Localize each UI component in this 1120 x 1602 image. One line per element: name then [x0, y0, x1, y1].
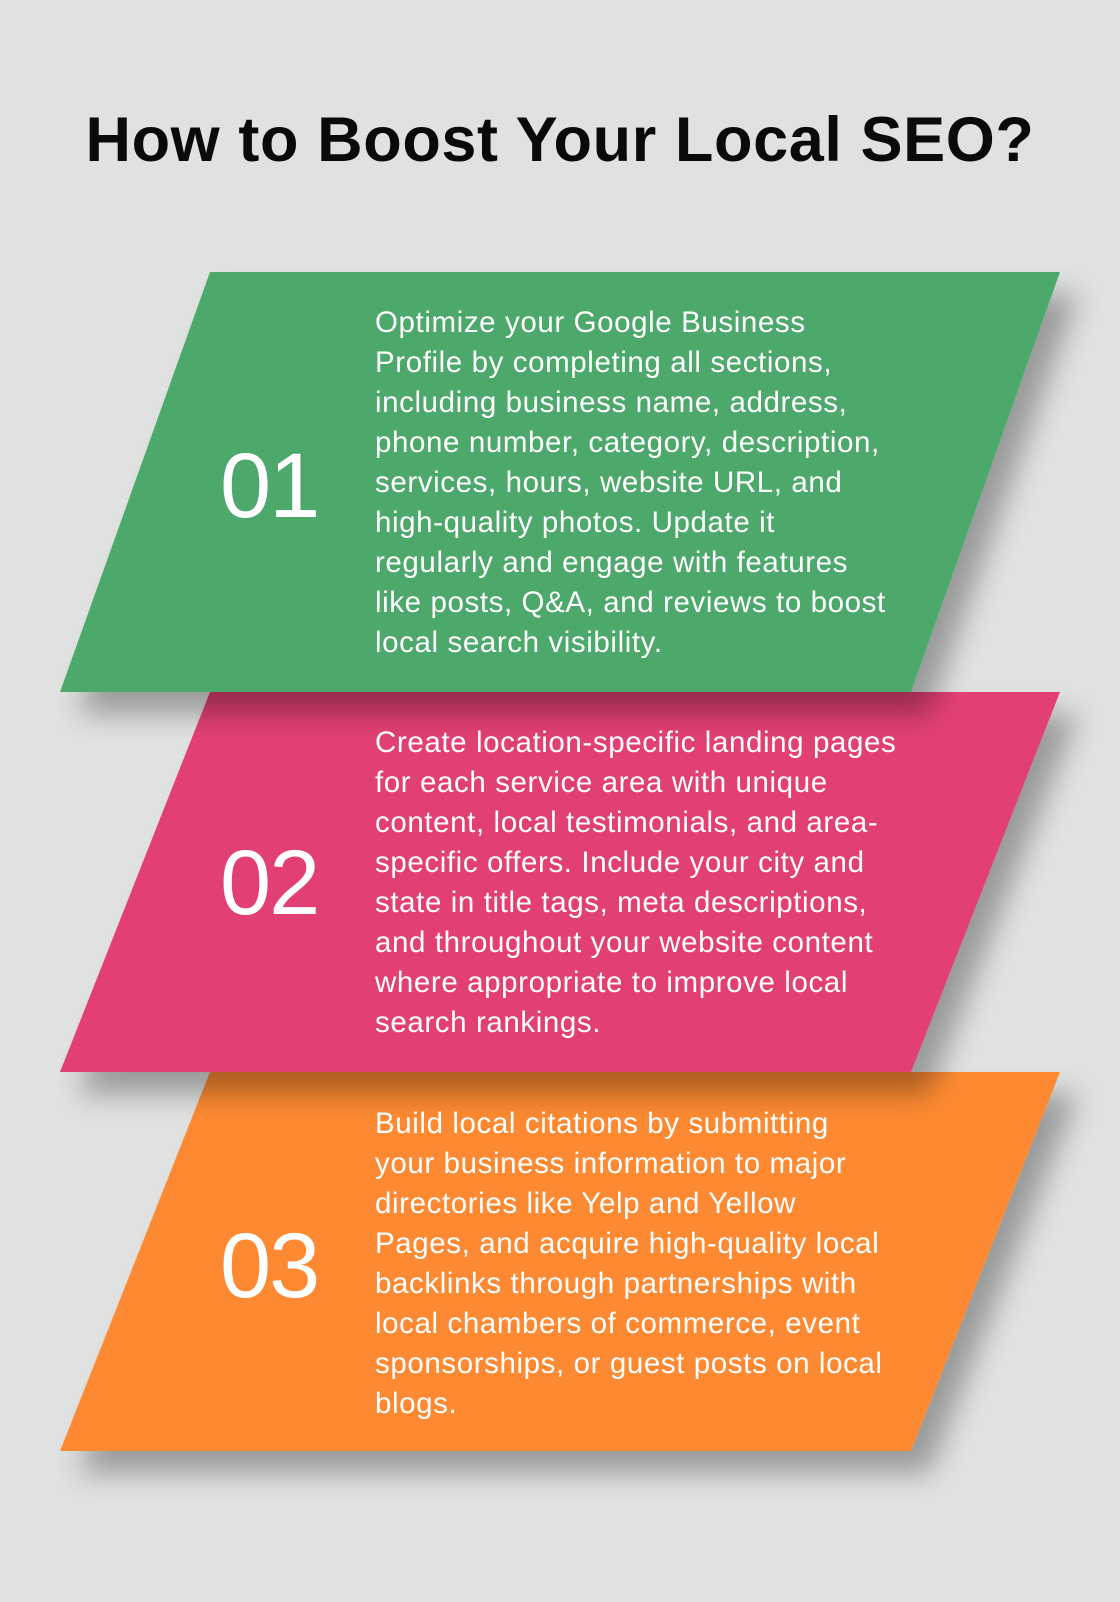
panel 3 text: backlinks through partnerships with [375, 1267, 857, 1300]
panel 2 text: specific offers. Include your city and [375, 846, 865, 879]
panel 2 text: where appropriate to improve local [375, 966, 848, 999]
panel 3 number: 03 [220, 1215, 318, 1317]
panel 2 number: 02 [220, 832, 318, 934]
panel 1 text [375, 306, 886, 659]
panel 1 text: including business name, address, [375, 386, 847, 419]
panel 3 text: your business information to major [375, 1147, 846, 1180]
panel 3 text: Build local citations by submitting [375, 1107, 829, 1140]
panel 2 text: Create location-specific landing pages [375, 726, 896, 759]
panel 3 shape [60, 1072, 1060, 1451]
panel 1 text: like posts, Q&A, and reviews to boost [375, 586, 886, 619]
panel 1 text: phone number, category, description, [375, 426, 880, 459]
panel 2 text: for each service area with unique [375, 766, 828, 799]
panel 2 shape [60, 692, 1060, 1072]
panel 2 text: and throughout your website content [375, 926, 873, 959]
panel 1 text: services, hours, website URL, and [375, 466, 842, 499]
panel 1 text: local search visibility. [375, 626, 663, 659]
title: How to Boost Your Local SEO? [85, 105, 1034, 175]
panel 3 text: Pages, and acquire high-quality local [375, 1227, 879, 1260]
panel 2 text: search rankings. [375, 1006, 601, 1039]
panel 2 text: state in title tags, meta descriptions, [375, 886, 867, 919]
panel 2 text [375, 726, 896, 1039]
panel 3 text: local chambers of commerce, event [375, 1307, 860, 1340]
panel 2 text: content, local testimonials, and area- [375, 806, 878, 839]
panel 3 text: blogs. [375, 1387, 457, 1420]
panel 3 text: directories like Yelp and Yellow [375, 1187, 796, 1220]
panel 1 text: high-quality photos. Update it [375, 506, 775, 539]
panel 1 number: 01 [220, 435, 318, 537]
panel 1 text: regularly and engage with features [375, 546, 848, 579]
panel 3 text [375, 1107, 883, 1420]
panel 3 text: sponsorships, or guest posts on local [375, 1347, 883, 1380]
panel 1 text: Optimize your Google Business [375, 306, 806, 339]
panel 1 text: Profile by completing all sections, [375, 346, 832, 379]
panel 1 shape [60, 272, 1060, 692]
